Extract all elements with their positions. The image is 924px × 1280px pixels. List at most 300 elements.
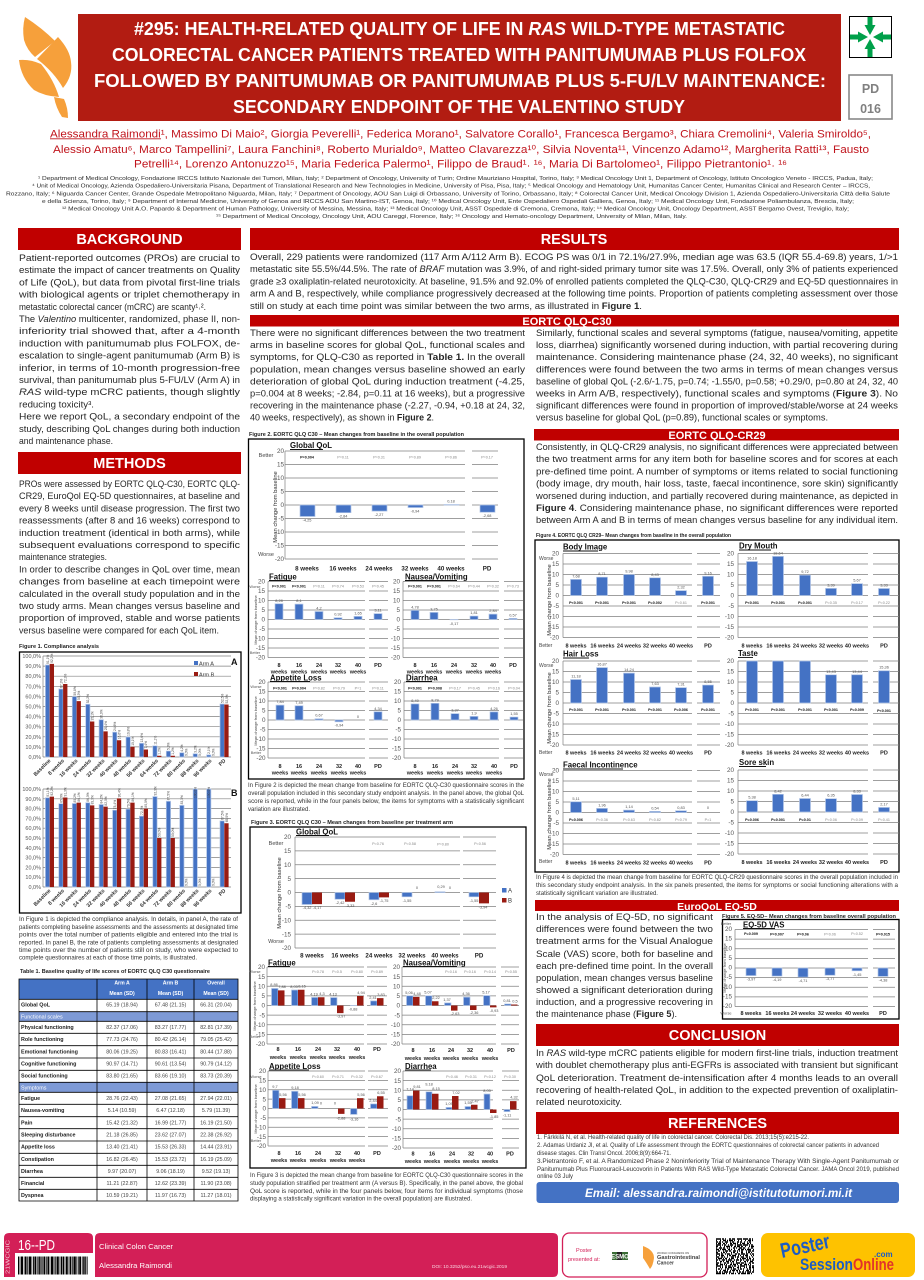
- chart: fig 3 appetite loss: P=0.60: [312, 1075, 324, 1079]
- chart: fig 3 nausea/vomiting: 2,22: [432, 995, 440, 1000]
- chart: fig 3 nausea/vomiting: -5: [394, 1012, 400, 1019]
- chart: fig 2 nausea/vomiting: -0,17: [450, 621, 458, 626]
- chart: faecal incontinence: 0,54: [651, 805, 660, 810]
- figure 5 chart: Better: [721, 921, 732, 926]
- text: QLQ-C30 left: p=0.004 at 8 weeks; -2.84, p=0.11 at 16 weeks), but a progressive: [250, 388, 525, 398]
- text: EQ-5D: treatment arms for the Visual Analogue: [536, 936, 713, 946]
- panel A chart: 10,0%: [25, 745, 41, 751]
- chart: dry mouth: [725, 542, 899, 650]
- chart: fig 2 nausea/vomiting: 16: [431, 663, 437, 669]
- chart: body image: 32 weeks: [643, 644, 667, 650]
- chart: fig 3 fatigue: 4,19: [310, 992, 318, 996]
- panel A chart: 91,1%: [46, 655, 50, 664]
- chart: fig 3 global QoL: 0,29: [437, 884, 445, 889]
- panel A chart: 8 weeks: [47, 758, 66, 777]
- figure 5 chart: 8 weeks: [740, 1011, 762, 1017]
- chart: hair loss: 32 weeks: [643, 750, 667, 756]
- figure 2 note: variation are illustrated.: [248, 807, 310, 813]
- chart: fig 2 diarrhea: 15: [394, 689, 401, 696]
- panel B chart: 0,0%: [28, 885, 41, 891]
- chart: fig 3 nausea/vomiting: P=0.16: [464, 970, 476, 974]
- chart: fig 3 appetite loss: 1,09: [311, 1100, 319, 1105]
- table 1: 16.19 (25.09): [200, 1157, 232, 1163]
- chart: fig 2 global QoL: P=0.31: [373, 456, 385, 460]
- chart: fig 2 appetite loss: 20: [258, 679, 266, 686]
- panel A chart: 32 weeks: [86, 758, 106, 779]
- chart: fig 3 appetite loss: -2,88: [337, 1116, 345, 1120]
- chart: fig 3 diarrhea: 7,02: [452, 1090, 460, 1095]
- chart: fig 3 appetite loss: 5: [262, 1096, 266, 1103]
- chart: fig 2 global QoL: Global QoL: [290, 441, 332, 450]
- chart: fig 3 global QoL: -4,17: [313, 905, 321, 910]
- chart: fig 2 appetite loss: 5: [262, 708, 266, 715]
- chart: fig 3 diarrhea: Diarrhea: [405, 1062, 437, 1071]
- chart: sore skin: 20: [727, 767, 734, 774]
- panel B chart: B: [231, 788, 238, 798]
- panel A chart: 0,0%: [184, 748, 188, 756]
- chart: body image: Worse: [539, 556, 554, 562]
- chart: fig 2 fatigue: P<0.001: [292, 584, 306, 588]
- figure 5 chart: [720, 920, 899, 1019]
- chart: fig 3 global QoL: -5: [285, 904, 291, 911]
- table 1: 27.08 (21.65): [155, 1096, 186, 1102]
- authors: Petrelli¹⁴, Lorenzo Antonuzzo¹⁵, Maria Federica Palermo¹, Filippo de Braud¹˒ ¹⁶, Maria Di Bartolomeo¹, Filippo Pietrantonio¹˒ ¹⁶: [134, 158, 787, 170]
- chart: fig 2 appetite loss: 16: [296, 764, 302, 770]
- chart: fig 3 appetite loss: 24: [315, 1151, 322, 1157]
- chart: taste: [725, 649, 899, 756]
- chart: fig 3 global QoL: -1,75: [380, 898, 388, 903]
- chart: sore skin: 0: [730, 809, 734, 816]
- chart: fig 2 diarrhea: 8,49: [411, 698, 419, 703]
- chart: body image: 9,98: [625, 568, 633, 574]
- text: results overview: Overall, 229 patients were randomized (117 Arm A/112 Arm B). ECOG PS was 0/1 in 72.1%/27.9%, median age was 63.5 (IQR 55.4-69.8) years, 1/>1: [250, 252, 898, 262]
- chart: fig 3 nausea/vomiting: 15: [393, 974, 400, 981]
- chart: faecal incontinence: 16 weeks: [590, 860, 615, 866]
- chart: fig 2 nausea/vomiting: P=0.73: [507, 584, 519, 588]
- text: results overview: grade ≥3 oxaliplatin-related neurotoxicity. At baseline, 91.5% and 92.0% of enrolled patients completed the QLQ-C30, QLQ-CR29 and EQ-5D questionnaires in: [250, 276, 898, 286]
- text: methods: In order to describe changes in QoL over time, mean: [19, 564, 240, 574]
- panel B chart: 84,2%: [100, 794, 104, 804]
- text: QLQ-C30 left: [250, 328, 526, 423]
- chart: fig 2 global QoL: -0,94: [411, 508, 420, 514]
- panel B chart: 16 weeks: [59, 888, 79, 909]
- chart: fig 3 nausea/vomiting: 5,06: [405, 990, 413, 995]
- chart: fig 2 diarrhea: -5: [395, 727, 401, 734]
- chart: fig 3 diarrhea: 1,09: [445, 1101, 453, 1106]
- table 1: 80.42 (26.14): [155, 1037, 186, 1043]
- chart: fig 2 fatigue: 24: [316, 663, 323, 669]
- text: conclusion: with doublet chemotherapy plus anti-EGFRs is associated with transient but significant: [535, 1060, 898, 1070]
- chart: fig 3 nausea/vomiting: P=0.14: [484, 970, 496, 974]
- panel A chart: 88 weeks: [180, 758, 200, 779]
- chart: body image: Body Image: [563, 542, 608, 552]
- table 1: 83.27 (17.77): [155, 1025, 186, 1031]
- chart: body image: -10: [550, 614, 559, 620]
- chart: body image: PD: [704, 644, 712, 650]
- chart: fig 2 appetite loss: P=0.004: [292, 686, 307, 690]
- panel A chart: 52,5%: [220, 694, 224, 703]
- chart: hair loss: P<0.001: [569, 708, 583, 712]
- panel B chart: 72,3%: [140, 806, 144, 815]
- chart: fig 3 global QoL: -20: [282, 945, 291, 952]
- text: EQ-5D: showed a significant deterioration during: [536, 985, 713, 995]
- chart: fig 2 nausea/vomiting: 1,81: [470, 610, 478, 615]
- chart: faecal incontinence: Mean change from baseline: [547, 778, 553, 850]
- chart: fig 3 nausea/vomiting: [391, 958, 519, 1062]
- table 1: 16.99 (21.77): [155, 1120, 186, 1126]
- chart: body image: 20: [552, 550, 559, 558]
- chart: taste: 15: [727, 668, 734, 676]
- chart: fig 3 nausea/vomiting: -10: [391, 1022, 400, 1029]
- chart: sore skin: P=0.01: [799, 818, 811, 822]
- panel A chart: 72 weeks: [153, 758, 173, 779]
- chart: fig 2 diarrhea: 0: [397, 717, 401, 724]
- chart: fig 3 fatigue: -0,88: [349, 1006, 357, 1012]
- chart: fig 3 nausea/vomiting: 0,81: [503, 998, 511, 1003]
- title banner: FOLLOWED BY PANITUMUMAB OR PANITUMUMAB PLUS 5-FU/LV MAINTENANCE:: [94, 71, 826, 91]
- chart: fig 3 global QoL: 40 weeks: [431, 952, 459, 960]
- icon: ESMO mark: ESMO: [611, 1254, 629, 1260]
- barcode: [18, 1256, 88, 1274]
- figure 5 chart: -1,45: [853, 972, 861, 977]
- panel A chart: 36,9%: [100, 709, 104, 719]
- chart: taste: 8 weeks: [741, 750, 763, 756]
- chart: fig 2 fatigue: Fatigue: [269, 572, 297, 582]
- figure 4 note: [536, 875, 899, 897]
- chart: fig 2 global QoL: P=0.004: [300, 456, 315, 460]
- chart: fig 2 fatigue: weeks: [329, 670, 346, 676]
- panel A chart: 25,4%: [104, 721, 108, 730]
- figure 3 note: displaying a statistically significant variation in the overall population) are illustrated.: [250, 1196, 472, 1202]
- panel B chart: 40,0%: [25, 846, 41, 852]
- chart: fig 2 diarrhea: 32: [471, 764, 477, 770]
- text: methods: changes from baseline at each timepoint were: [19, 577, 240, 587]
- chart: taste: 40 weeks: [845, 750, 869, 756]
- panel B chart: 48 weeks: [112, 888, 133, 909]
- chart: taste: P<0.001: [877, 709, 891, 713]
- logo: PosterSessionOnline: Online: [853, 1255, 894, 1274]
- chart: fig 2 fatigue: 32: [335, 663, 341, 669]
- figure 1 note: complete questionnaires at each of those time points, is illustrated.: [19, 956, 197, 962]
- figure 5 chart: -4,38: [879, 977, 887, 982]
- chart: sore skin: -15: [725, 840, 734, 848]
- chart: dry mouth: 15: [727, 561, 734, 568]
- chart: hair loss: 24 weeks: [617, 750, 641, 756]
- chart: sore skin: [725, 758, 899, 866]
- chart: fig 2 global QoL: 0,18: [447, 498, 455, 504]
- heading: EuroQoL EQ-5D: EuroQoL EQ-5D: [677, 901, 757, 913]
- figure 1 note: reported. In panel B, the rate of patients completing assessments at designated: [19, 940, 238, 946]
- chart: fig 2 global QoL: [258, 441, 498, 572]
- chart: sore skin: 6,44: [801, 792, 810, 798]
- table 1: Diarrhea: [21, 1169, 44, 1175]
- chart: dry mouth: P=0.17: [851, 601, 863, 605]
- heading: results: RESULTS: [541, 232, 608, 248]
- text: QLQ-CR29: pre-defined time point. A number of symptoms or items related to social functioning: [536, 466, 898, 476]
- chart: fig 3 diarrhea: -1,11: [503, 1112, 511, 1118]
- chart: fig 2 global QoL: 24 weeks: [365, 566, 393, 572]
- table 1: 16.19 (21.50): [200, 1120, 232, 1126]
- chart: fig 3 fatigue: 5: [261, 993, 265, 1000]
- footer: poster presented at: Poster: [576, 1248, 592, 1254]
- footer: poster presented at: Gastrointestinal: [657, 1255, 701, 1261]
- chart: fig 3 fatigue: 7,88: [278, 984, 286, 989]
- chart: dry mouth: 3,33: [880, 582, 888, 588]
- chart: fig 3 fatigue: Fatigue: [268, 958, 296, 968]
- text: background: study, describing QoL changes during both induction: [19, 424, 240, 434]
- chart: fig 2 fatigue: 0: [261, 617, 265, 624]
- text: QLQ-C30 left: 40 weeks, respectively), as shown in Figure 2.: [250, 413, 434, 423]
- chart: fig 2 global QoL: 8 weeks: [295, 566, 319, 572]
- chart: fig 3 appetite loss: Worse: [250, 1074, 262, 1079]
- footer: poster presented at: presented at:: [568, 1257, 601, 1263]
- chart: dry mouth: P<0.001: [745, 601, 759, 605]
- chart: fig 3 nausea/vomiting: 5,17: [482, 990, 490, 994]
- chart: fig 2 diarrhea: weeks: [465, 770, 482, 776]
- chart: fig 3 appetite loss: Mean change from baseline: [253, 1084, 258, 1134]
- logo: PosterSessionOnline: [761, 1230, 915, 1277]
- chart: fig 3 fatigue: P=0.89: [371, 970, 383, 974]
- heading: EORTC QLQ-CR29: EORTC QLQ-CR29: [668, 430, 766, 442]
- affiliations: ⁴ Unit of Medical Oncology, Azienda Ospedaliero-Universitaria Pisana, Department of Translational Research and New Technologies in Medicine, University of Pisa, Pisa, Italy; ⁵ Medical Oncology and Hematology Unit, Humanitas Cancer Center, Humanitas Clinical and Research Center – IRCCS,: [32, 184, 870, 190]
- chart: fig 3 global QoL: 20: [284, 834, 291, 841]
- chart: fig 3 fatigue: 24: [315, 1047, 322, 1053]
- panel A chart: 92,2%: [50, 653, 54, 663]
- chart: fig 2 global QoL: 40 weeks: [437, 566, 465, 572]
- panel B chart: 24 weeks: [72, 888, 93, 909]
- chart: taste: 10: [727, 679, 734, 686]
- chart: faecal incontinence: P=0.63: [623, 818, 635, 822]
- chart: body image: 15: [552, 561, 559, 568]
- chart: fig 3 fatigue: -5: [259, 1012, 265, 1019]
- panel B chart: 10,0%: [25, 875, 41, 881]
- chart: fig 3 diarrhea: weeks: [462, 1159, 479, 1165]
- affiliations: e della Scienza, Torino, Italy; ⁹ Department of Internal Medicine, University of Genoa and IRCCS AOU San Martino-IST, Genoa, Italy; ¹⁰ Medical Oncology Unit, Ente Ospedaliero Ospedali Galliera, Genoa, Italy; ¹¹ Medical Oncology Unit, Fondazione Poliambulanza, Brescia, Italy;: [42, 199, 854, 205]
- figure 5 chart: EQ-5D VAS: [743, 920, 784, 930]
- chart: fig 3 fatigue: 40: [354, 1047, 360, 1053]
- chart: fig 3 fatigue: 16: [295, 1047, 301, 1053]
- table 1: 27.94 (22.01): [200, 1096, 232, 1102]
- chart: fig 3 diarrhea: 1,55: [464, 1100, 472, 1105]
- panel B chart: 64 weeks: [139, 888, 160, 909]
- chart: fig 2 fatigue: 15: [258, 588, 265, 595]
- panel B chart: 70,0%: [25, 816, 41, 822]
- chart: fig 3 diarrhea: 8: [411, 1152, 415, 1158]
- chart: hair loss: 10: [552, 679, 559, 686]
- chart: taste: 5: [730, 690, 734, 696]
- table 1: 28.76 (22.43): [106, 1096, 138, 1102]
- chart: fig 2 appetite loss: P=0.79: [333, 686, 345, 690]
- chart: taste: -15: [725, 732, 734, 738]
- chart: fig 3 diarrhea: weeks: [443, 1159, 460, 1165]
- chart: fig 3 fatigue: weeks: [309, 1055, 326, 1061]
- chart: fig 3 fatigue: weeks: [348, 1055, 365, 1061]
- chart: fig 3 global QoL: -1,55: [470, 898, 478, 903]
- chart: taste: 0: [730, 700, 734, 707]
- chart: fig 3 fatigue: -3,97: [337, 1014, 345, 1018]
- text: references: online 03 July: [537, 1174, 573, 1180]
- chart: fig 2 global QoL: -5: [278, 516, 284, 522]
- authors: [50, 128, 871, 170]
- chart: body image: P<0.001: [622, 601, 636, 605]
- chart: fig 3 fatigue: -10: [256, 1022, 265, 1029]
- text: methods: every 8 weeks until disease progression. The first two: [19, 503, 240, 513]
- chart: fig 2 nausea/vomiting: -20: [391, 655, 400, 662]
- chart: fig 2 nausea/vomiting: 15: [393, 588, 400, 595]
- chart: sore skin: 8,42: [774, 788, 782, 793]
- chart: faecal incontinence: P=1: [705, 818, 711, 822]
- panel B chart: 91,1%: [46, 787, 50, 797]
- figure 5 chart: -3,97: [747, 977, 755, 982]
- chart: body image: [539, 542, 720, 650]
- panel B chart: 20,0%: [25, 865, 41, 871]
- chart: faecal incontinence: Faecal Incontinence: [563, 760, 638, 770]
- chart: fig 2 diarrhea: 1,9: [471, 710, 477, 715]
- text: EQ-5D: the maintenance phase (Figure 5).: [536, 1009, 677, 1019]
- chart: faecal incontinence: 5: [555, 799, 559, 806]
- table 1: 80.06 (19.25): [106, 1050, 138, 1056]
- chart: fig 3 global QoL: P=0.76: [372, 842, 384, 846]
- chart: taste: PD: [880, 750, 888, 756]
- chart: dry mouth: P=0.001: [798, 601, 812, 605]
- chart: dry mouth: 3,39: [827, 582, 835, 587]
- chart: fig 3 appetite loss: 40: [354, 1151, 360, 1157]
- chart: faecal incontinence: [539, 760, 720, 866]
- chart: faecal incontinence: 15: [552, 778, 559, 785]
- chart: sore skin: 32 weeks: [819, 860, 843, 866]
- text: conclusion: [535, 1048, 898, 1107]
- panel A chart: 80 weeks: [166, 758, 187, 779]
- footer: poster id block: 21WCGIC: [6, 1239, 12, 1274]
- chart: fig 3 appetite loss: weeks: [309, 1158, 326, 1164]
- chart: fig 3 diarrhea: 9,81: [413, 1084, 421, 1089]
- panel A chart: 0,0%: [198, 748, 202, 756]
- chart: fig 3 appetite loss: 9,18: [291, 1085, 299, 1090]
- chart: sore skin: P=0.06: [825, 818, 837, 822]
- chart: fig 2 nausea/vomiting: 0,57: [509, 612, 517, 617]
- footer: poster id block: [4, 1233, 93, 1277]
- table 1: Dyspnea: [21, 1193, 44, 1199]
- chart: taste: 16 weeks: [766, 750, 791, 756]
- panel A chart: 52,0%: [225, 694, 229, 704]
- chart: body image: P<0.001: [701, 601, 715, 605]
- QR code: [716, 1239, 754, 1274]
- chart: fig 3 nausea/vomiting: 4,48: [413, 991, 421, 996]
- chart: fig 3 diarrhea: 10: [394, 1087, 401, 1094]
- chart: fig 3 nausea/vomiting: weeks: [423, 1056, 440, 1062]
- chart: fig 3 appetite loss: weeks: [329, 1158, 346, 1164]
- chart: fig 3 nausea/vomiting: 24: [448, 1048, 455, 1054]
- chart: body image: -15: [550, 624, 559, 631]
- panel A chart: 60,0%: [25, 694, 41, 700]
- table 1: Social functioning: [21, 1074, 68, 1080]
- logo: PosterSessionOnline: Session: [800, 1255, 853, 1274]
- authors: Alessandra Raimondi¹, Massimo Di Maio², Giorgia Peverelli¹, Federica Morano¹, Salvatore Corallo¹, Francesca Bergamo³, Chiara Cremolini⁴, Valeria Smiroldo⁵,: [50, 128, 871, 140]
- panel A chart: 48 weeks: [112, 758, 133, 779]
- affiliations: ¹ Department of Medical Oncology, Fondazione IRCCS Istituto Nazionale dei Tumori, Milan, Italy; ² Department of Oncology, University of Turin; Ordine Mauriziano Hospital, Torino, Italy; ³ Medical Oncology Unit 1, Department of Oncology, Istituto Oncologico Veneto - IRCCS, Padua, Italy;: [38, 176, 873, 182]
- figure 1 note: In Figure 1 is depicted the compliance analysis. In details, in panel A, the rate of: [19, 917, 238, 923]
- chart: fig 2 diarrhea: weeks: [446, 770, 463, 776]
- chart: fig 2 appetite loss: 15: [258, 689, 266, 696]
- chart: fig 2 nausea/vomiting: Nausea/Vomiting: [405, 572, 468, 582]
- figure 1 note: [19, 917, 239, 962]
- chart: fig 2 nausea/vomiting: 32: [471, 663, 477, 669]
- chart: fig 2 global QoL: -4,25: [303, 518, 311, 522]
- text: methods: PROs were assessed by EORTC QLQ-C30, EORTC QLQ-: [19, 479, 240, 489]
- chart: dry mouth: 5,67: [853, 578, 861, 583]
- chart: fig 3 global QoL: 15: [284, 848, 291, 855]
- table 1: Fatigue: [21, 1096, 40, 1102]
- text: background: The Valentino multicenter, randomized, phase II, non-: [19, 314, 240, 324]
- chart: fig 3 appetite loss: 16: [295, 1151, 301, 1157]
- chart: hair loss: 0: [555, 700, 559, 707]
- chart: faecal incontinence: 10: [552, 788, 559, 796]
- heading: references: [536, 1112, 899, 1134]
- chart: fig 2 nausea/vomiting: weeks: [484, 670, 501, 676]
- figure 5 chart: -4,19: [773, 977, 781, 982]
- chart: fig 2 global QoL: P=0.86: [445, 456, 457, 460]
- panel A chart: 72,3%: [64, 674, 68, 683]
- chart: fig 2 diarrhea: 4,26: [490, 706, 498, 711]
- text: background: metastatic colorectal cancer (mCRC) are scanty¹˒².: [19, 302, 206, 312]
- icon: green inward arrows badge: [850, 16, 892, 58]
- chart: fig 2 nausea/vomiting: P=0.32: [487, 584, 499, 588]
- panel A chart: 52,2%: [86, 694, 90, 703]
- chart: fig 2 appetite loss: 24: [316, 764, 323, 770]
- chart: taste: P<0.001: [824, 708, 838, 712]
- chart: fig 3 fatigue: Better: [250, 1034, 261, 1039]
- chart: fig 3 appetite loss: -10: [257, 1124, 266, 1131]
- chart: fig 2 nausea/vomiting: 2,84: [489, 608, 498, 613]
- chart: fig 3 fatigue: 15: [258, 974, 265, 981]
- chart: sore skin: 8 weeks: [741, 860, 763, 866]
- text: background: reducing toxicity³.: [19, 399, 94, 409]
- email bar: Email: alessandra.raimondi@istitutotumori.mi.it: [585, 1186, 853, 1200]
- panel B chart: 91,3%: [64, 787, 68, 796]
- figure 5 chart: -3,77: [826, 976, 834, 981]
- chart: hair loss: P<0.001: [648, 708, 662, 712]
- chart: hair loss: 5: [555, 690, 559, 696]
- chart: fig 2 appetite loss: 0: [262, 717, 266, 724]
- table 1: [19, 979, 238, 1201]
- chart: fig 3 diarrhea: [392, 1062, 519, 1165]
- chart: fig 3 appetite loss: -5: [260, 1115, 266, 1122]
- chart: fig 3 fatigue: Worse: [249, 969, 261, 974]
- figure 5 chart: 24 weeks: [791, 1011, 815, 1017]
- panel B chart: 92,3%: [153, 786, 157, 796]
- chart: taste: -20: [725, 742, 734, 749]
- chart: fig 3 appetite loss: weeks: [348, 1158, 365, 1164]
- chart: fig 3 diarrhea: weeks: [423, 1159, 440, 1165]
- chart: fig 2 fatigue: 8: [277, 663, 281, 669]
- chart: sore skin: 6,35: [827, 793, 835, 798]
- affiliations: Rozzano, Italy; ⁶ Niguarda Cancer Center, Grande Ospedale Metropolitano Niguarda, Milan, Italy; ⁷ Department of Oncology, AOU San Luigi di Orbassano, University of Torino, Orbassano, Italy; ⁸ Colorectal Cancer Unit, Medical Oncology Division 1, Azienda Ospedaliero-Universitaria Città della Salute: [6, 191, 890, 197]
- table 1: 22.38 (26.92): [200, 1132, 232, 1138]
- chart: fig 2 appetite loss: weeks: [330, 770, 347, 776]
- panel A chart: [22, 653, 238, 779]
- panel A chart: 70,0%: [25, 684, 41, 690]
- panel B chart: PD: [218, 888, 228, 898]
- panel B chart: 67,5%: [220, 810, 224, 820]
- chart: hair loss: 8,55: [704, 679, 712, 684]
- chart: fig 2 appetite loss: Worse: [250, 684, 262, 689]
- badge: PD 016: 016: [860, 102, 881, 116]
- chart: sore skin: 40 weeks: [845, 860, 869, 866]
- panel B chart: 80 weeks: [166, 888, 187, 909]
- chart: fig 3 nausea/vomiting: -20: [391, 1041, 400, 1048]
- table 1: 11.97 (16.73): [155, 1193, 186, 1199]
- chart: body image: 5: [555, 582, 559, 589]
